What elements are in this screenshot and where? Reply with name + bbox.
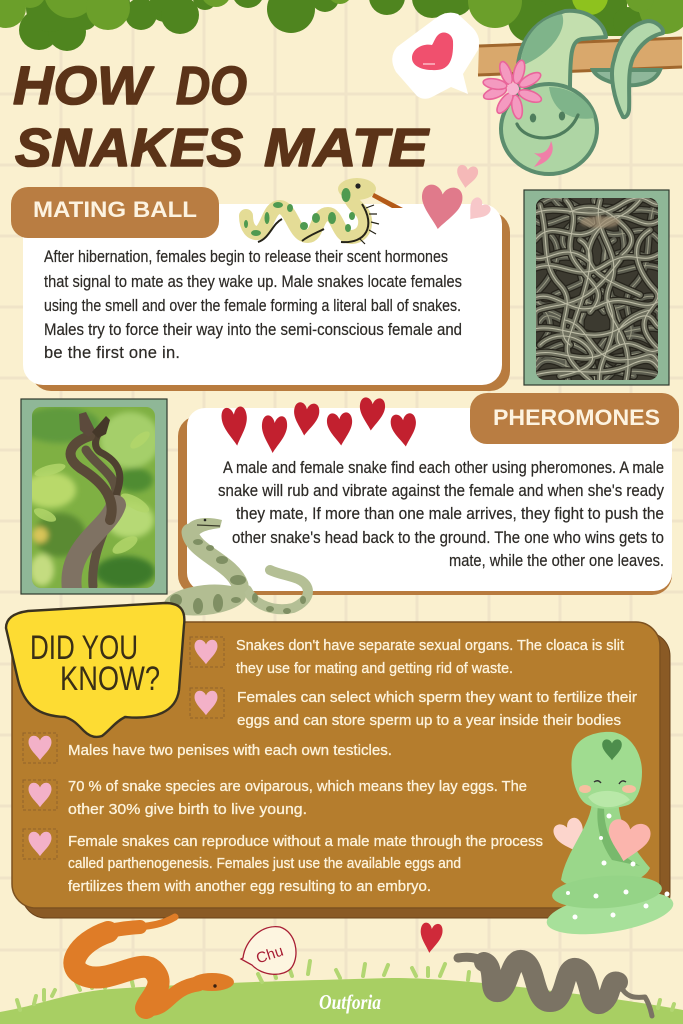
photo frame: snake mating ball xyxy=(524,190,669,385)
did you know callout: KNOW? xyxy=(60,660,160,698)
icon: chu speech bubble: Chu xyxy=(254,943,286,967)
facts text: called parthenogenesis. Females just use the available eggs and xyxy=(68,856,461,872)
icon: pink hearts xyxy=(418,164,493,232)
facts text: other 30% give birth to live young. xyxy=(68,802,307,818)
mating ball label xyxy=(11,187,219,238)
grass hill xyxy=(0,961,683,1024)
did you know callout xyxy=(6,603,184,737)
icon: chu speech bubble xyxy=(241,927,296,974)
heart bullets xyxy=(23,637,224,859)
title xyxy=(13,56,430,178)
title: DO xyxy=(176,56,247,116)
title: MATE xyxy=(264,118,430,178)
facts text: Males have two penises with each own testicles. xyxy=(68,743,392,759)
mating ball text: After hibernation, females begin to release their scent hormones xyxy=(44,248,448,266)
icon: red hearts row xyxy=(221,397,418,454)
facts text: 70 % of snake species are oviparous, which means they lay eggs. The xyxy=(68,779,527,795)
icon: gray snake xyxy=(458,957,652,1016)
cartoon snake hanging from branch xyxy=(482,11,663,174)
icon: yellow spotted snake xyxy=(244,178,403,244)
facts text: they use for mating and getting rid of waste. xyxy=(236,661,513,677)
pheromones label xyxy=(470,393,679,444)
facts text: Snakes don't have separate sexual organs. The cloaca is slit xyxy=(236,638,624,654)
pheromones text xyxy=(218,459,665,570)
title: SNAKES xyxy=(15,118,243,178)
icon: small red heart xyxy=(418,922,443,954)
facts text: Females can select which sperm they want to fertilize their xyxy=(237,690,637,706)
mating ball text: using the smell and over the female forming a literal ball of snakes. xyxy=(44,297,461,315)
branch xyxy=(478,38,682,75)
photo frame: two snakes entwined xyxy=(20,399,167,594)
mating ball text: be the first one in. xyxy=(44,344,180,362)
icon: camouflage coiled snake xyxy=(163,518,308,619)
title: HOW xyxy=(13,56,154,116)
pheromones label: PHEROMONES xyxy=(493,405,660,430)
icon: chibi green snake with pink hearts xyxy=(544,732,676,942)
speech bubble with heart xyxy=(392,13,479,99)
mating ball text: Males try to force their way into the semi-conscious female and xyxy=(44,321,462,339)
icon: orange snake xyxy=(74,917,234,1008)
mating ball text xyxy=(44,248,462,362)
facts text: fertilizes them with another egg resulting to an embryo. xyxy=(68,879,431,895)
mating ball text: that signal to mate as they wake up. Male snakes locate females xyxy=(44,273,462,291)
outforia logo: Outforia xyxy=(319,990,381,1014)
facts text: Female snakes can reproduce without a male mate through the process xyxy=(68,834,543,850)
panel: did you know xyxy=(12,622,670,918)
pheromones text: they mate, If more than one male arrives, they fight to push the xyxy=(236,505,664,523)
facts text: eggs and can store sperm up to a year inside their bodies xyxy=(237,713,621,729)
panel: pheromones xyxy=(178,393,679,595)
foliage canopy xyxy=(0,0,683,51)
panel: mating ball xyxy=(11,187,510,391)
mating ball label: MATING BALL xyxy=(33,197,197,222)
did you know callout: DID YOU xyxy=(30,629,138,667)
facts text xyxy=(68,638,637,895)
